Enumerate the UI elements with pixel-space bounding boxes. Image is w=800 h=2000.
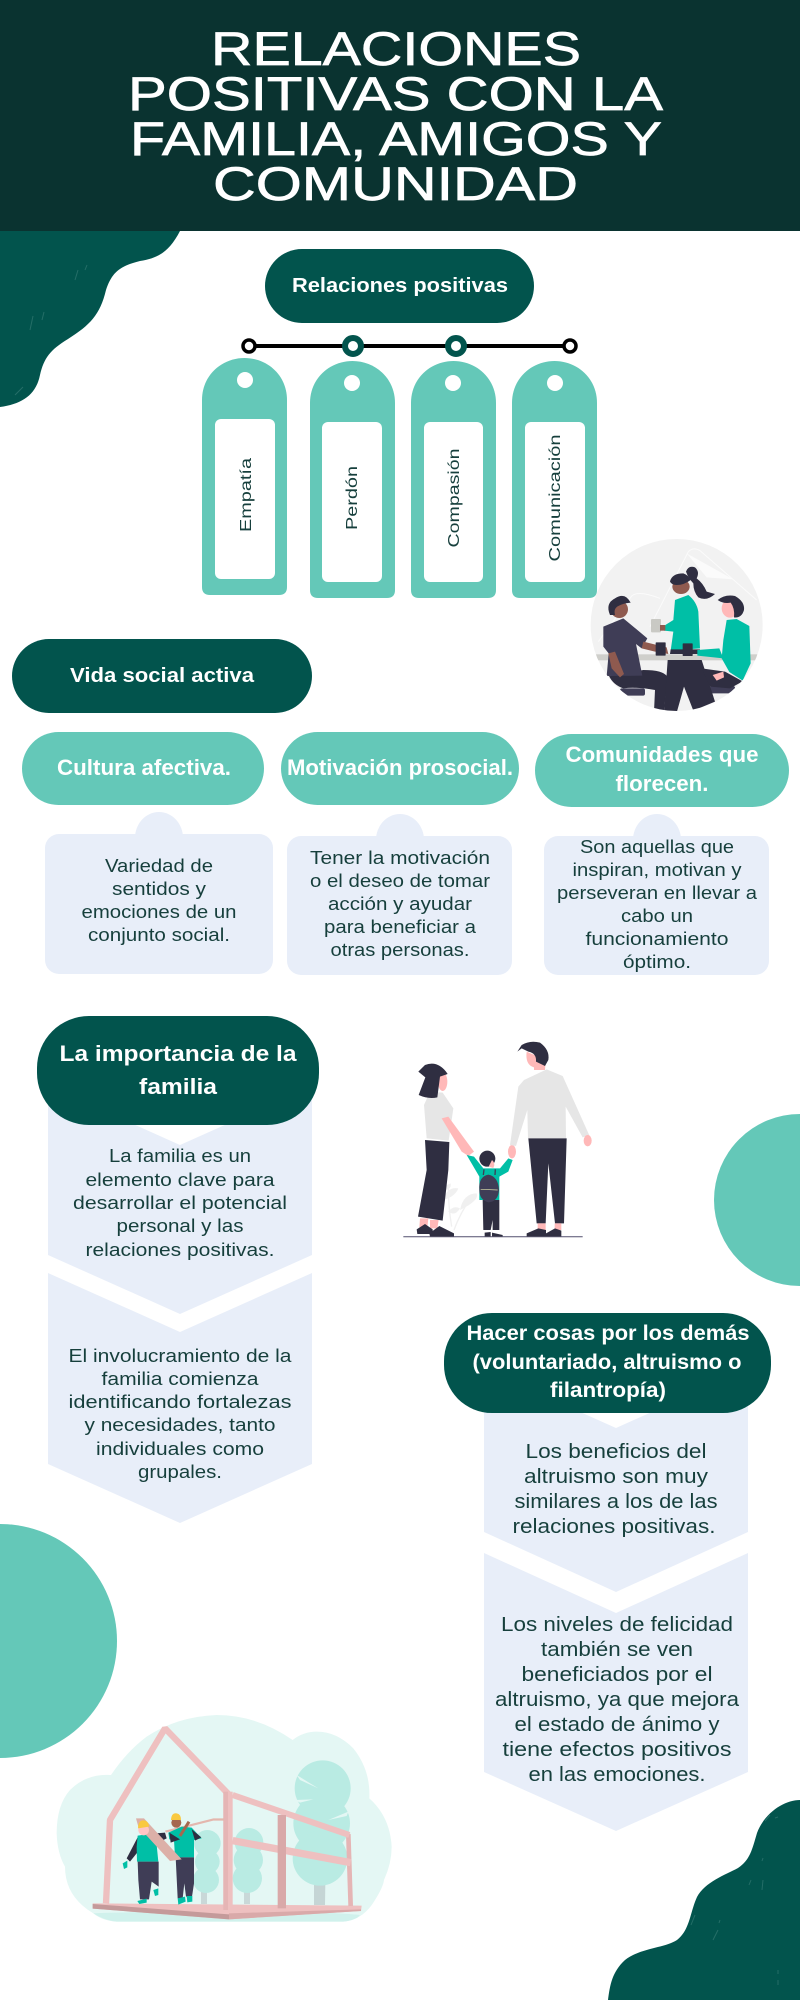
chevron: altruismo text 2: tiene efectos positivos — [502, 1739, 732, 1761]
tag: Perdón — [310, 361, 395, 598]
pill heading: La importancia de la familia: familia — [139, 1074, 218, 1099]
card: Comunidades que florecen: funcionamiento — [586, 929, 728, 949]
chevron: altruismo text 2: también se ven — [541, 1639, 693, 1661]
card: Cultura afectiva: conjunto social. — [88, 925, 230, 945]
chevron: familia text 1: personal y las — [116, 1216, 244, 1236]
header band with title: POSITIVAS CON LA — [128, 67, 664, 120]
chevron: familia text 2 — [48, 1273, 312, 1523]
chevron: altruismo text 2: beneficiados por el — [522, 1664, 712, 1686]
header band with title — [0, 0, 800, 231]
chevron: familia text 1: relaciones positivas. — [86, 1240, 274, 1260]
card: Motivación prosocial: acción y ayudar — [328, 894, 472, 914]
pill heading: Hacer cosas por los demás: (voluntariado, altruismo o — [472, 1351, 742, 1374]
chevron: altruismo text 1: similares a los de las — [514, 1491, 718, 1513]
chevron: altruismo text 1: relaciones positivas. — [512, 1516, 716, 1538]
decorative blob: bottom right — [608, 1800, 800, 2000]
pill heading: Relaciones positivas: Relaciones positivas — [292, 275, 508, 297]
pill: Cultura afectiva: Cultura afectiva. — [57, 755, 231, 780]
pill heading: Hacer cosas por los demás — [444, 1313, 771, 1413]
card: Cultura afectiva: emociones de un — [82, 902, 236, 922]
chevron: altruismo text 1 — [484, 1369, 748, 1592]
illustration: workers building a house frame — [57, 1715, 392, 1922]
pill: Comunidades que florecen: florecen. — [616, 771, 708, 796]
pill heading: Hacer cosas por los demás: filantropía) — [550, 1379, 666, 1402]
pill heading: Vida social activa — [12, 639, 312, 713]
card: Motivación prosocial: o el deseo de tomar — [310, 871, 490, 891]
card: Comunidades que florecen: inspiran, motivan y — [572, 860, 742, 880]
card: Motivación prosocial: otras personas. — [330, 940, 470, 960]
tag: Comunicación: Comunicación — [547, 434, 564, 562]
card: Cultura afectiva: sentidos y — [112, 879, 206, 899]
card: Comunidades que florecen: óptimo. — [623, 952, 691, 972]
card: Comunidades que florecen: Son aquellas que — [580, 837, 734, 857]
chevron: familia text 2: familia comienza — [102, 1369, 260, 1389]
hanging rail with rings — [243, 338, 576, 354]
pill: Cultura afectiva — [22, 732, 264, 805]
chevron: familia text 1: elemento clave para — [86, 1170, 276, 1190]
chevron: familia text 2: El involucramiento de la — [68, 1346, 293, 1366]
chevron: familia text 1: La familia es un — [109, 1146, 251, 1166]
chevron: familia text 2: grupales. — [138, 1462, 222, 1482]
pill: Motivación prosocial — [281, 732, 519, 805]
chevron: familia text 2: individuales como — [96, 1439, 264, 1459]
header band with title: RELACIONES — [211, 22, 581, 75]
pill heading: Relaciones positivas — [265, 249, 534, 323]
card: Cultura afectiva — [45, 812, 273, 974]
tag: Empatía — [202, 358, 287, 595]
decorative blob: top left — [0, 231, 180, 407]
header band with title: COMUNIDAD — [213, 157, 578, 210]
chevron: altruismo text 1: Los beneficios del — [526, 1441, 706, 1463]
tag: Compasión: Compasión — [446, 448, 463, 548]
chevron: familia text 2: identificando fortalezas — [68, 1392, 292, 1412]
card: Comunidades que florecen — [544, 814, 769, 975]
card: Motivación prosocial — [287, 814, 512, 975]
chevron: familia text 2: y necesidades, tanto — [84, 1415, 276, 1435]
pill heading: Vida social activa: Vida social activa — [70, 665, 255, 687]
pill heading: La importancia de la familia: La importancia de la — [60, 1041, 297, 1066]
pill heading: La importancia de la familia — [37, 1016, 319, 1125]
card: Comunidades que florecen: cabo un — [621, 906, 693, 926]
pill heading: Hacer cosas por los demás: Hacer cosas por los demás — [466, 1322, 750, 1345]
tag: Perdón: Perdón — [344, 466, 361, 530]
chevron: altruismo text 2: en las emociones. — [528, 1764, 706, 1786]
card: Cultura afectiva: Variedad de — [105, 856, 213, 876]
tag: Empatía: Empatía — [238, 458, 255, 532]
chevron: altruismo text 2: Los niveles de felicidad — [501, 1614, 733, 1636]
pill: Motivación prosocial: Motivación prosocial. — [287, 755, 513, 780]
illustration: family holding hands — [403, 1042, 592, 1237]
header band with title: FAMILIA, AMIGOS Y — [130, 112, 662, 165]
illustration: friends at a table — [591, 539, 763, 713]
pill: Comunidades que florecen — [535, 734, 789, 807]
decorative half circle: right — [714, 1114, 800, 1286]
tag: Comunicación — [512, 361, 597, 598]
card: Comunidades que florecen: perseveran en llevar a — [557, 883, 758, 903]
chevron: altruismo text 2: el estado de ánimo y — [514, 1714, 720, 1736]
chevron: altruismo text 1: altruismo son muy — [524, 1466, 708, 1488]
card: Motivación prosocial: Tener la motivación — [310, 848, 490, 868]
chevron: familia text 1 — [48, 1086, 312, 1314]
card: Motivación prosocial: para beneficiar a — [324, 917, 477, 937]
decorative half circle: left — [0, 1524, 117, 1758]
chevron: familia text 1: desarrollar el potencial — [73, 1193, 287, 1213]
chevron: altruismo text 2 — [484, 1553, 748, 1831]
chevron: altruismo text 2: altruismo, ya que mejora — [495, 1689, 740, 1711]
pill: Comunidades que florecen: Comunidades que — [566, 742, 758, 767]
tag: Compasión — [411, 361, 496, 598]
